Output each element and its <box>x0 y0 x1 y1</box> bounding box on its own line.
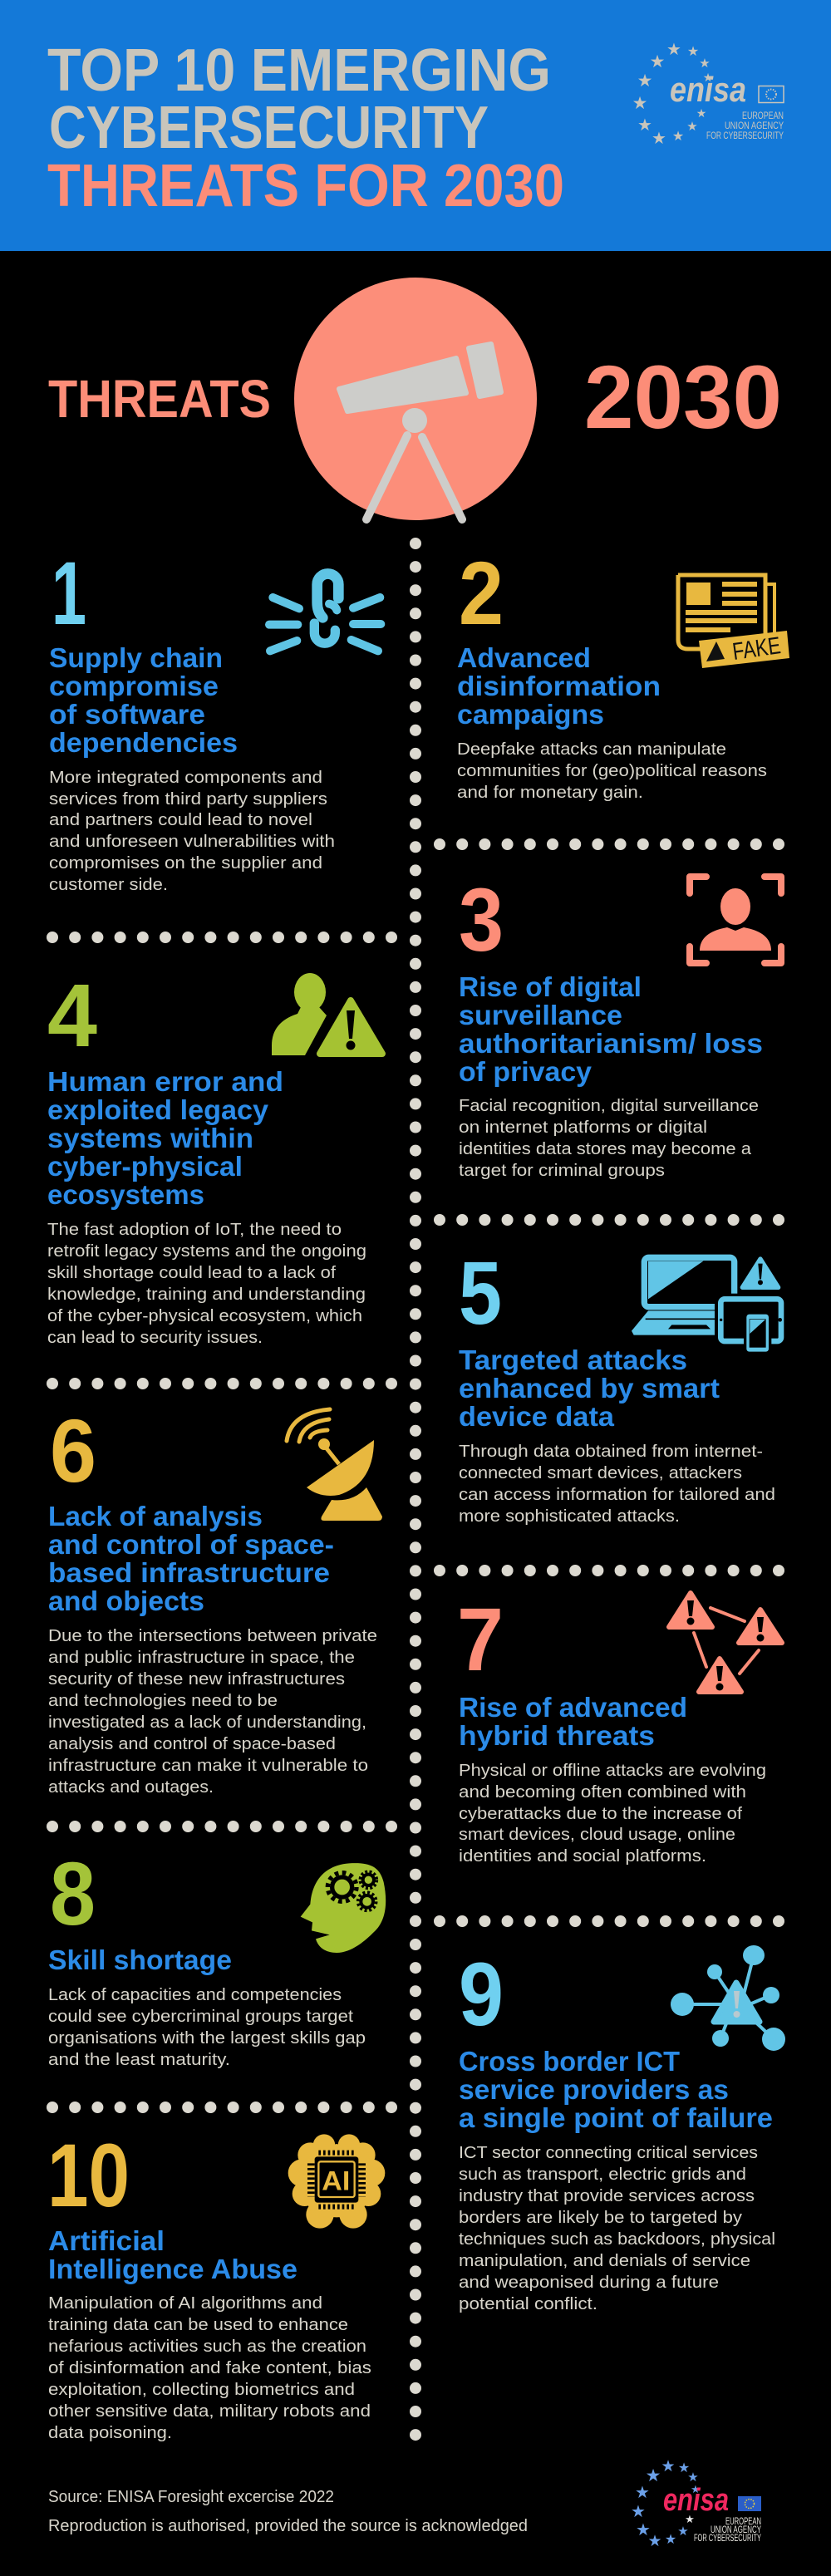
heading: cyber-physical <box>47 1151 243 1182</box>
body text: Physical or offline attacks are evolving <box>459 1761 766 1780</box>
number 1: 1 <box>52 543 86 643</box>
body text: industry that provide services across <box>459 2186 755 2205</box>
logo: enisa header: ★ <box>637 71 652 91</box>
heading: campaigns <box>457 699 604 730</box>
panel: threat 4 <box>47 965 382 1347</box>
body text: exploitation, collecting biometrics and <box>48 2380 355 2399</box>
body text: More integrated components and <box>49 768 322 787</box>
body text: and for monetary gain. <box>457 783 643 802</box>
logo: enisa footer: ★ <box>636 2519 651 2539</box>
icon: satellite dish <box>287 1409 382 1521</box>
body text <box>459 2143 775 2313</box>
panel: threat 7 <box>457 1589 782 1866</box>
logo: enisa footer: ★ <box>661 2457 676 2475</box>
panel: threat 6 <box>48 1400 382 1797</box>
number 4: 4 <box>47 965 97 1065</box>
panel: threat 2 <box>457 543 789 802</box>
icon: linked warnings <box>669 1593 782 1692</box>
logo: enisa header: ★ <box>687 43 699 59</box>
body text: retrofit legacy systems and the ongoing <box>47 1241 366 1261</box>
logo: enisa footer: ★ <box>677 2524 689 2539</box>
heading: a single point of failure <box>459 2102 773 2133</box>
label: threats: THREATS <box>48 369 271 429</box>
logo: enisa header: ★ <box>696 107 706 120</box>
icon: telescope <box>294 278 537 520</box>
heading: Rise of advanced <box>459 1692 687 1723</box>
body text: could see cybercriminal groups target <box>48 2007 353 2026</box>
heading <box>48 1501 334 1616</box>
logo: enisa footer: ★ <box>691 2484 701 2496</box>
heading: Cross border ICT <box>459 2046 680 2077</box>
body text: The fast adoption of IoT, the need to <box>47 1220 342 1239</box>
icon: fake news <box>678 575 789 668</box>
body text: customer side. <box>49 875 168 894</box>
body text <box>48 2293 371 2442</box>
heading: based infrastructure <box>48 1557 330 1588</box>
body text: security of these new infrastructures <box>48 1669 345 1689</box>
body text: Through data obtained from internet- <box>459 1442 763 1461</box>
logo: enisa header: ★ <box>632 93 647 113</box>
logo: enisa footer: UNION AGENCY <box>711 2524 761 2535</box>
body text: and becoming often combined with <box>459 1782 746 1802</box>
panel: threat 9 <box>459 1944 785 2313</box>
source note: Source: ENISA Foresight excercise 2022 <box>48 2487 334 2506</box>
body text: more sophisticated attacks. <box>459 1507 680 1526</box>
body text: such as transport, electric grids and <box>459 2165 746 2184</box>
heading <box>459 1692 687 1751</box>
icon: face recognition <box>690 877 781 963</box>
body text: smart devices, cloud usage, online <box>459 1825 735 1844</box>
body text: identities data stores may become a <box>459 1139 752 1158</box>
logo: enisa footer: ★ <box>687 2470 699 2485</box>
title: TOP 10 EMERGING <box>47 37 551 104</box>
icon: broken chain <box>269 573 381 651</box>
icon: fake news: FAKE <box>731 632 782 666</box>
footer <box>48 2457 761 2550</box>
body text: attacks and outages. <box>48 1777 214 1797</box>
icon: AI chip brain <box>288 2134 385 2229</box>
body text: investigated as a lack of understanding, <box>48 1713 366 1732</box>
panel: threat 5 <box>459 1242 787 1526</box>
body text: identities and social platforms. <box>459 1846 706 1866</box>
icon: person and warning <box>272 973 382 1055</box>
header banner <box>0 0 831 251</box>
heading: Rise of digital <box>459 971 642 1002</box>
icon: AI chip brain: AI <box>322 2166 350 2195</box>
logo: enisa footer: ★ <box>647 2532 662 2550</box>
heading: of privacy <box>459 1056 593 1087</box>
panel: threat 10 <box>47 2125 385 2442</box>
heading: device data <box>459 1401 615 1432</box>
heading <box>49 642 238 758</box>
heading <box>459 2046 773 2133</box>
heading: and objects <box>48 1585 204 1616</box>
number 8: 8 <box>50 1843 96 1944</box>
body text: potential conflict. <box>459 2294 597 2313</box>
body text: Manipulation of AI algorithms and <box>48 2293 322 2313</box>
body text: and the least maturity. <box>48 2050 230 2069</box>
reproduction note: Reproduction is authorised, provided the source is acknowledged <box>48 2516 528 2535</box>
logo: enisa footer: ★ <box>685 2514 695 2526</box>
heading: hybrid threats <box>459 1720 655 1751</box>
panel: threat 8 <box>48 1843 386 2069</box>
heading: systems within <box>47 1123 253 1153</box>
logo: enisa header: ★ <box>686 119 698 134</box>
logo: enisa header: ★ <box>637 115 652 135</box>
logo: enisa footer <box>631 2457 761 2550</box>
logo: enisa footer: EUROPEAN <box>725 2515 761 2527</box>
body text: ICT sector connecting critical services <box>459 2143 758 2162</box>
body text: cyberattacks due to the increase of <box>459 1804 742 1823</box>
body text: skill shortage could lead to a lack of <box>47 1263 336 1282</box>
body text: analysis and control of space-based <box>48 1734 336 1753</box>
heading: enhanced by smart <box>459 1373 720 1404</box>
body text: Due to the intersections between private <box>48 1626 377 1645</box>
logo: enisa header: ★ <box>672 128 684 144</box>
icon: network warning <box>671 1945 785 2051</box>
body text: nefarious activities such as the creation <box>48 2337 366 2356</box>
panel: threat 1 <box>49 543 381 894</box>
heading: ecosystems <box>47 1179 204 1210</box>
logo: enisa footer: ★ <box>678 2460 690 2475</box>
body text: of disinformation and fake content, bias <box>48 2358 371 2377</box>
logo: enisa footer: ★ <box>665 2531 676 2547</box>
body text: on internet platforms or digital <box>459 1118 707 1137</box>
body text: target for criminal groups <box>459 1161 665 1180</box>
body text <box>49 768 335 894</box>
heading: Advanced <box>457 642 591 673</box>
heading: Human error and <box>47 1066 283 1097</box>
body text: organisations with the largest skills gap <box>48 2028 366 2048</box>
heading: compromise <box>49 671 219 701</box>
body text: Deepfake attacks can manipulate <box>457 740 726 759</box>
body text: and partners could lead to novel <box>49 810 312 829</box>
body text: can access information for tailored and <box>459 1485 775 1504</box>
heading: surveillance <box>459 1000 622 1030</box>
heading: service providers as <box>459 2074 729 2105</box>
heading: of software <box>49 699 205 730</box>
dotted dividers <box>52 543 780 2436</box>
body text: compromises on the supplier and <box>49 853 322 873</box>
body text: connected smart devices, attackers <box>459 1463 742 1482</box>
title: THREATS FOR 2030 <box>47 153 564 219</box>
logo: enisa header: ★ <box>699 56 711 71</box>
body text <box>459 1096 759 1180</box>
hero: threats 2030 with telescope <box>48 278 782 520</box>
panel: threat 3 <box>459 869 781 1180</box>
number 6: 6 <box>50 1400 96 1501</box>
body text: techniques such as backdoors, physical <box>459 2229 775 2249</box>
heading: dependencies <box>49 727 238 758</box>
title: CYBERSECURITY <box>49 95 489 161</box>
logo: enisa header: enisa <box>670 70 746 109</box>
heading: exploited legacy <box>47 1094 269 1125</box>
heading <box>459 1345 720 1432</box>
heading <box>459 971 763 1087</box>
logo: enisa header: FOR CYBERSECURITY <box>706 130 784 141</box>
body text: can lead to security issues. <box>47 1328 263 1347</box>
body text <box>48 1985 366 2069</box>
body text: borders are likely be to targeted by <box>459 2208 743 2227</box>
number 7: 7 <box>457 1589 504 1689</box>
heading <box>457 642 661 730</box>
heading: Targeted attacks <box>459 1345 687 1375</box>
heading: Artificial <box>48 2225 165 2256</box>
body text <box>457 740 767 802</box>
body text <box>459 1761 766 1866</box>
icon: head with gears <box>301 1863 386 1953</box>
heading: Skill shortage <box>48 1944 232 1975</box>
body text: data poisoning. <box>48 2423 172 2442</box>
body text <box>47 1220 366 1347</box>
heading: authoritarianism/ loss <box>459 1028 763 1059</box>
body text: infrastructure can make it vulnerable to <box>48 1756 368 1775</box>
number 3: 3 <box>459 869 504 970</box>
logo: enisa header: ★ <box>703 71 713 85</box>
logo: enisa header: ★ <box>652 128 666 148</box>
logo: enisa footer: ★ <box>635 2482 650 2502</box>
title <box>47 37 564 219</box>
number 9: 9 <box>459 1944 504 2044</box>
logo: enisa header <box>632 39 784 148</box>
heading <box>48 2225 297 2284</box>
heading: disinformation <box>457 671 661 701</box>
heading: Supply chain <box>49 642 223 673</box>
body text: Lack of capacities and competencies <box>48 1985 342 2004</box>
number 2: 2 <box>459 543 504 643</box>
heading <box>47 1066 283 1210</box>
body text: and public infrastructure in space, the <box>48 1648 355 1667</box>
logo: enisa footer: enisa <box>663 2483 729 2518</box>
body text: training data can be used to enhance <box>48 2315 348 2334</box>
label: 2030: 2030 <box>584 347 782 447</box>
number 10: 10 <box>47 2125 130 2225</box>
body text: and unforeseen vulnerabilities with <box>49 832 335 851</box>
body text: communities for (geo)political reasons <box>457 761 767 780</box>
body text: services from third party suppliers <box>49 789 327 809</box>
logo: enisa header: ★ <box>666 39 681 59</box>
logo: enisa footer: ★ <box>631 2501 646 2521</box>
body text: of the cyber-physical ecosystem, which <box>47 1306 362 1325</box>
logo: enisa header: EUROPEAN <box>742 110 784 121</box>
body text <box>48 1626 377 1797</box>
body text: manipulation, and denials of service <box>459 2251 750 2270</box>
body text: and technologies need to be <box>48 1691 278 1710</box>
heading: Intelligence Abuse <box>48 2254 297 2284</box>
body text: other sensitive data, military robots and <box>48 2401 371 2421</box>
body text: knowledge, training and understanding <box>47 1285 366 1304</box>
body text: Facial recognition, digital surveillance <box>459 1096 759 1115</box>
logo: enisa footer: FOR CYBERSECURITY <box>694 2532 761 2544</box>
heading: and control of space- <box>48 1529 334 1560</box>
logo: enisa footer: ★ <box>646 2465 661 2485</box>
heading: Lack of analysis <box>48 1501 263 1531</box>
icon: smart devices <box>632 1257 787 1354</box>
logo: enisa header: UNION AGENCY <box>725 120 784 131</box>
logo: enisa header: ★ <box>650 52 665 71</box>
number 5: 5 <box>459 1242 502 1343</box>
body text <box>459 1442 775 1526</box>
body text: and weaponised during a future <box>459 2273 719 2292</box>
